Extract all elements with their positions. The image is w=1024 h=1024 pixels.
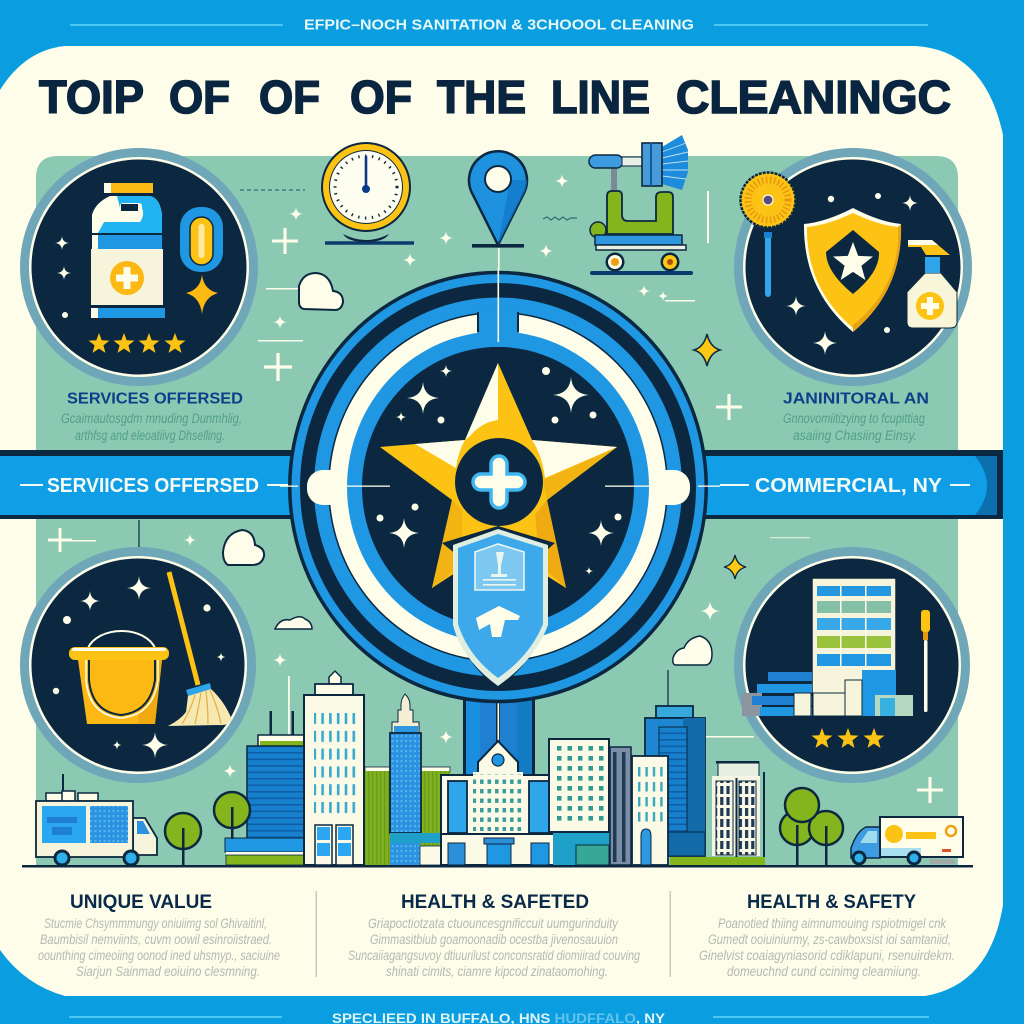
header tagline: EFPIC–NOCH SANITATION & 3CHOOOL CLEANING bbox=[304, 16, 694, 34]
rating stars bbox=[812, 728, 884, 748]
band label right: COMMERCIAL, NY bbox=[755, 475, 943, 497]
panel: health and safety: Gumedt ooiuiniurmy, zs-cawboxsist ioi samtaniid, bbox=[708, 932, 951, 947]
building: cream office block bbox=[549, 739, 631, 865]
panel: health and safeted: Griapoctiotzata ctuouncesgnificcuit uumgurinduity bbox=[368, 916, 619, 931]
dashed and squiggle accents bbox=[139, 190, 668, 706]
note: janitorial bbox=[783, 390, 929, 443]
icon: detergent bottle bbox=[91, 183, 165, 318]
building: window tower bbox=[670, 761, 765, 865]
note: services offered bbox=[61, 390, 243, 443]
panel: health and safeted: HEALTH & SAFETED bbox=[401, 892, 589, 913]
central emblem bbox=[280, 268, 720, 703]
title: CLEANINGC bbox=[676, 71, 951, 123]
icon: brush pole bbox=[921, 610, 930, 712]
note: janitorial: Gnnovomiitizying to fcupittiag bbox=[783, 411, 925, 426]
emblem rings bbox=[288, 271, 708, 703]
title: THE bbox=[437, 71, 526, 123]
title bbox=[39, 71, 951, 123]
panel: health and safety: HEALTH & SAFETY bbox=[747, 892, 916, 913]
panel: health and safeted: Suncaiiagangsuvoy dtiuurilust conconsratid diomiirad couving bbox=[348, 948, 640, 963]
circle badge: office building bbox=[734, 547, 970, 783]
delivery van right bbox=[851, 817, 963, 864]
emblem shield bbox=[442, 526, 555, 688]
emblem night sparkles bbox=[376, 365, 622, 575]
icon: round brush bbox=[740, 172, 796, 297]
panel: health and safety: Ginelvist coaiagyniasorid cdiklapuni, rsenuirdekm. bbox=[699, 948, 955, 963]
rating stars bbox=[89, 333, 185, 353]
panel: unique value: Baumbisil nemviints, cuvm oowil esinroiistraed. bbox=[40, 932, 272, 947]
panel: unique value: Stucmie Chsymmmungy oniuiimg sol Ghivaitinl, bbox=[44, 916, 267, 931]
building: blue striped tower bbox=[225, 735, 304, 865]
trees right cluster bbox=[780, 788, 843, 866]
icon: office tower bbox=[742, 578, 913, 716]
panel: unique value: Siarjun Sainmad eoiuino clesmning. bbox=[76, 964, 260, 979]
icon: spray bottle bbox=[907, 240, 957, 328]
tree left tall bbox=[214, 792, 250, 839]
note: janitorial: JANINITORAL AN bbox=[783, 390, 929, 408]
yellow sparkles bbox=[694, 334, 746, 579]
panel: health and safeted bbox=[348, 892, 640, 979]
panel: health and safety bbox=[699, 892, 955, 979]
delivery van left bbox=[36, 774, 157, 865]
icon: yellow shield bbox=[804, 208, 901, 332]
panel: health and safeted: shinati cimits, ciamre kipcod zinataomohing. bbox=[386, 964, 608, 979]
icon: capsule bbox=[180, 207, 223, 272]
icon: clock bbox=[321, 142, 414, 243]
note: services offered: arthfsg and eleoatiivg Dhselling. bbox=[75, 428, 225, 443]
icon: mop bbox=[168, 572, 232, 726]
building: cream city hall bbox=[441, 741, 554, 865]
title: OF bbox=[259, 71, 320, 123]
icon: small clouds bbox=[223, 273, 712, 665]
note: services offered: Gcaimautosgdm mnuding Dunmhlig, bbox=[61, 411, 242, 426]
title: OF bbox=[350, 71, 412, 123]
icon: cleaning cart with brush bbox=[589, 135, 693, 275]
emblem gold star bbox=[380, 363, 617, 588]
circle badge: bucket and mop bbox=[20, 547, 256, 783]
panel: health and safeted: Gimmasitbiub goamoonadib ocestba jivenosauuion bbox=[370, 932, 618, 947]
emblem side knobs bbox=[307, 470, 347, 505]
panel: unique value: UNIQUE VALUE bbox=[70, 892, 212, 913]
antennas bbox=[270, 676, 294, 736]
panel: health and safety: domeuchnd cund ccinimg cleamiiung. bbox=[727, 964, 921, 979]
building: green and blue block bbox=[365, 694, 452, 865]
connector lines and stem bbox=[463, 248, 535, 780]
building: tall blue tower right bbox=[645, 706, 705, 856]
panel: health and safety: Poanotied thiing aimnumouing rspiotmigel cnk bbox=[718, 916, 947, 931]
building: white block with arched door bbox=[632, 756, 668, 865]
panel: unique value: oounthing cimeoiing oonod ined uhsmyp., saciuine bbox=[38, 948, 280, 963]
plus symbol bbox=[473, 456, 525, 508]
panel: unique value bbox=[38, 892, 280, 979]
decorative sparkles on teal bbox=[48, 174, 943, 803]
circle badge: shield and spray bbox=[734, 148, 972, 386]
teal illustration panel bbox=[36, 156, 958, 866]
icon: bucket bbox=[69, 631, 169, 724]
band label left: SERVIICES OFFERSED bbox=[47, 475, 259, 497]
note: janitorial: asaiing Chasiing Einsy. bbox=[793, 428, 917, 443]
ground line bbox=[22, 865, 973, 868]
building: white tower bbox=[304, 671, 364, 865]
horizontal blue band bbox=[0, 450, 1003, 519]
circle badge: cleaning products bbox=[20, 148, 258, 386]
icon: location pin bbox=[469, 151, 527, 248]
title: TOIP bbox=[39, 71, 144, 123]
title: LINE bbox=[551, 71, 650, 123]
city skyline bbox=[22, 671, 973, 868]
note: services offered: SERVICES OFFERSED bbox=[67, 390, 243, 408]
title: OF bbox=[169, 71, 230, 123]
tree left small bbox=[165, 813, 201, 866]
